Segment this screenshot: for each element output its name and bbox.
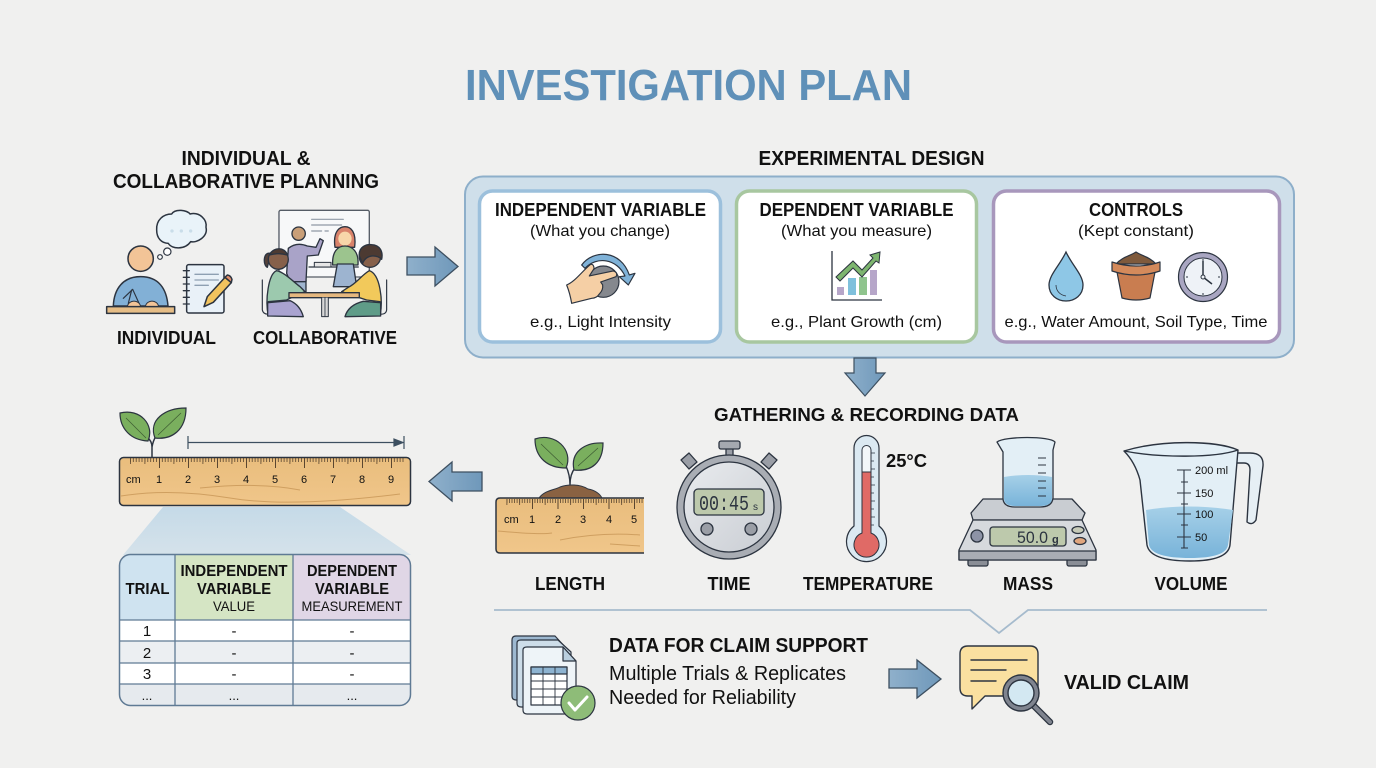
icon: soil pot [1112,252,1160,300]
text: data for claim support: Multiple Trials & Replicates [609,663,846,685]
card: independent variable [480,191,720,342]
table: trial data: ... [229,688,239,703]
text: data for claim support: Needed for Reliability [609,687,796,709]
icon: ruler with plant: 7 [330,474,336,486]
icon: ruler with plant: 1 [156,474,162,486]
icon: measuring jug: 150 [1195,488,1213,500]
icon: ruler with plant: 8 [359,474,365,486]
icon: claim bubble with magnifier [960,646,1050,722]
panel: individual and collaborative planning [107,148,397,348]
icon: ruler with plant: 5 [272,474,278,486]
heading: planning: COLLABORATIVE PLANNING [113,171,379,193]
icon: ruler with plant: 9 [388,474,394,486]
icon: stopwatch [677,441,781,559]
table: trial data: DEPENDENT [307,563,397,580]
heading: planning: INDIVIDUAL & [182,148,310,170]
table: trial data: VALUE [213,598,255,614]
beam from ruler to table [123,507,411,555]
icon: length ruler and seedling: 1 [529,514,535,526]
card: controls [994,191,1280,342]
icon: thermometer [847,436,886,562]
card: dependent variable: (What you measure) [781,223,932,240]
label: collaborative: COLLABORATIVE [253,328,397,348]
icon: ruler with plant: 2 [185,474,191,486]
panel: experimental design [465,176,1294,358]
icon: clock [1178,252,1228,302]
title: INVESTIGATION PLAN [465,61,912,110]
icon: length ruler and seedling: 2 [555,514,561,526]
card: independent variable: e.g., Light Intensity [530,314,671,331]
table: trial data: VARIABLE [197,581,271,598]
icon: growth chart [832,251,882,300]
icon: hand turning dial [567,254,635,303]
table: trial data [120,554,411,706]
icon: ruler with plant: 6 [301,474,307,486]
icon: ruler with plant [120,408,410,506]
icon: stopwatch: s [753,502,758,513]
icon: balance with beaker: g [1052,534,1059,546]
card: independent variable: (What you change) [530,223,670,240]
icon: measuring jug: 200 ml [1195,465,1228,477]
table: trial data: VARIABLE [315,581,389,598]
label: temperature reading: 25°C [886,451,927,471]
heading: planning [113,148,379,193]
arrow: data to ruler [429,462,482,501]
icon: data documents with check [512,636,595,720]
card: dependent variable: e.g., Plant Growth (cm) [771,314,942,331]
card: controls: (Kept constant) [1078,223,1194,240]
table: trial data: - [350,645,354,662]
table: trial data: 1 [143,623,151,640]
table: trial data: - [232,645,236,662]
label: volume: VOLUME [1154,574,1228,594]
table: trial data: ... [347,688,357,703]
card: dependent variable [736,191,976,342]
table: trial data: - [350,666,354,683]
bracket divider [494,610,1267,633]
card: independent variable: INDEPENDENT VARIABLE [495,200,706,220]
table: trial data: TRIAL [126,581,170,598]
label: length: LENGTH [535,574,605,594]
table: trial data: 3 [143,666,151,683]
icon: length ruler and seedling: 4 [606,514,612,526]
table: trial data: - [232,623,236,640]
text: data for claim support [609,635,868,709]
icon: measurement span arrow [188,436,404,449]
heading: gathering and recording data: GATHERING & RECORDING DATA [714,405,1019,425]
icon: measuring jug: 50 [1195,532,1207,544]
icon: measuring jug [1124,443,1263,561]
card: controls: CONTROLS [1089,200,1183,220]
icon: ruler with plant: 3 [214,474,220,486]
label: mass: MASS [1003,574,1053,594]
icon: balance with beaker [959,438,1096,566]
label: valid claim: VALID CLAIM [1064,672,1189,694]
table: trial data: 2 [143,645,151,662]
icon: stopwatch: 00:45 [699,494,749,517]
card: controls: e.g., Water Amount, Soil Type, Time [1004,314,1268,331]
arrow: design to data [845,358,885,396]
text: data for claim support: DATA FOR CLAIM SUPPORT [609,635,868,657]
table: trial data: MEASUREMENT [302,598,403,614]
icon: length ruler and seedling [496,437,644,553]
icon: water drop [1049,252,1083,301]
icon: individual person planning [107,210,232,313]
label: individual: INDIVIDUAL [117,328,216,348]
heading: experimental design: EXPERIMENTAL DESIGN [758,148,984,170]
icon: length ruler and seedling: 3 [580,514,586,526]
arrow: data to claim [889,660,941,698]
icon: balance with beaker: 50.0 [1017,528,1048,547]
icon: length ruler and seedling: 5 [631,514,637,526]
arrow: planning to design [407,247,458,286]
table: trial data: INDEPENDENT [180,563,288,580]
icon: collaborative group at whiteboard [262,210,387,317]
table: trial data: - [350,623,354,640]
table: trial data: - [232,666,236,683]
icon: measuring jug: 100 [1195,509,1213,521]
label: temperature: TEMPERATURE [803,574,933,594]
icon: ruler with plant: cm [126,474,141,486]
icon: ruler with plant: 4 [243,474,249,486]
table: trial data: ... [142,688,152,703]
card: dependent variable: DEPENDENT VARIABLE [760,200,954,220]
icon: length ruler and seedling: cm [504,514,519,526]
label: time: TIME [708,574,750,594]
